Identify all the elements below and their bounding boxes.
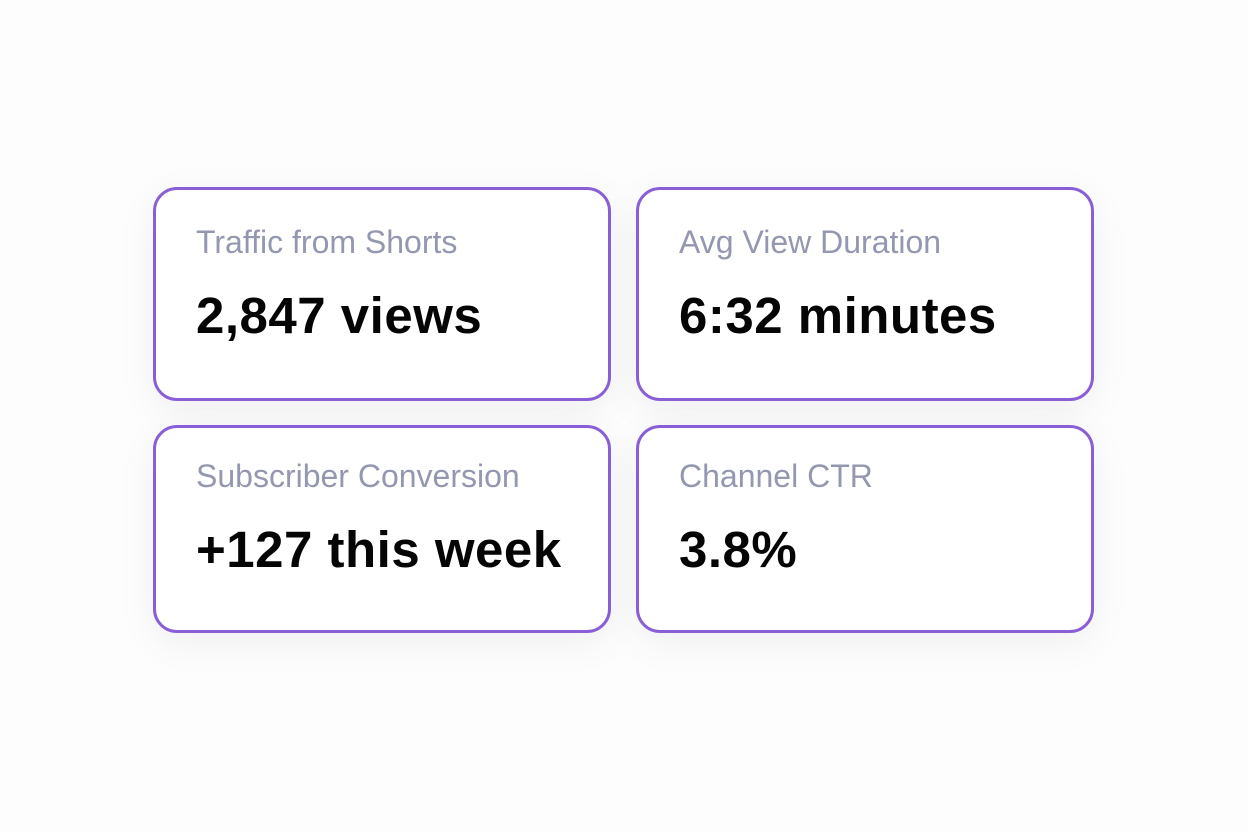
value: +127 this week bbox=[196, 521, 562, 578]
value: 2,847 views bbox=[196, 287, 482, 344]
card: subscriber conversion bbox=[153, 425, 611, 633]
label: Subscriber Conversion bbox=[196, 458, 520, 494]
card: avg view duration bbox=[636, 187, 1094, 401]
label: Avg View Duration bbox=[679, 224, 941, 260]
card: channel ctr bbox=[636, 425, 1094, 633]
label: Channel CTR bbox=[679, 458, 873, 494]
card: traffic from shorts bbox=[153, 187, 611, 401]
value: 6:32 minutes bbox=[679, 287, 997, 344]
label: Traffic from Shorts bbox=[196, 224, 457, 260]
value: 3.8% bbox=[679, 521, 797, 578]
